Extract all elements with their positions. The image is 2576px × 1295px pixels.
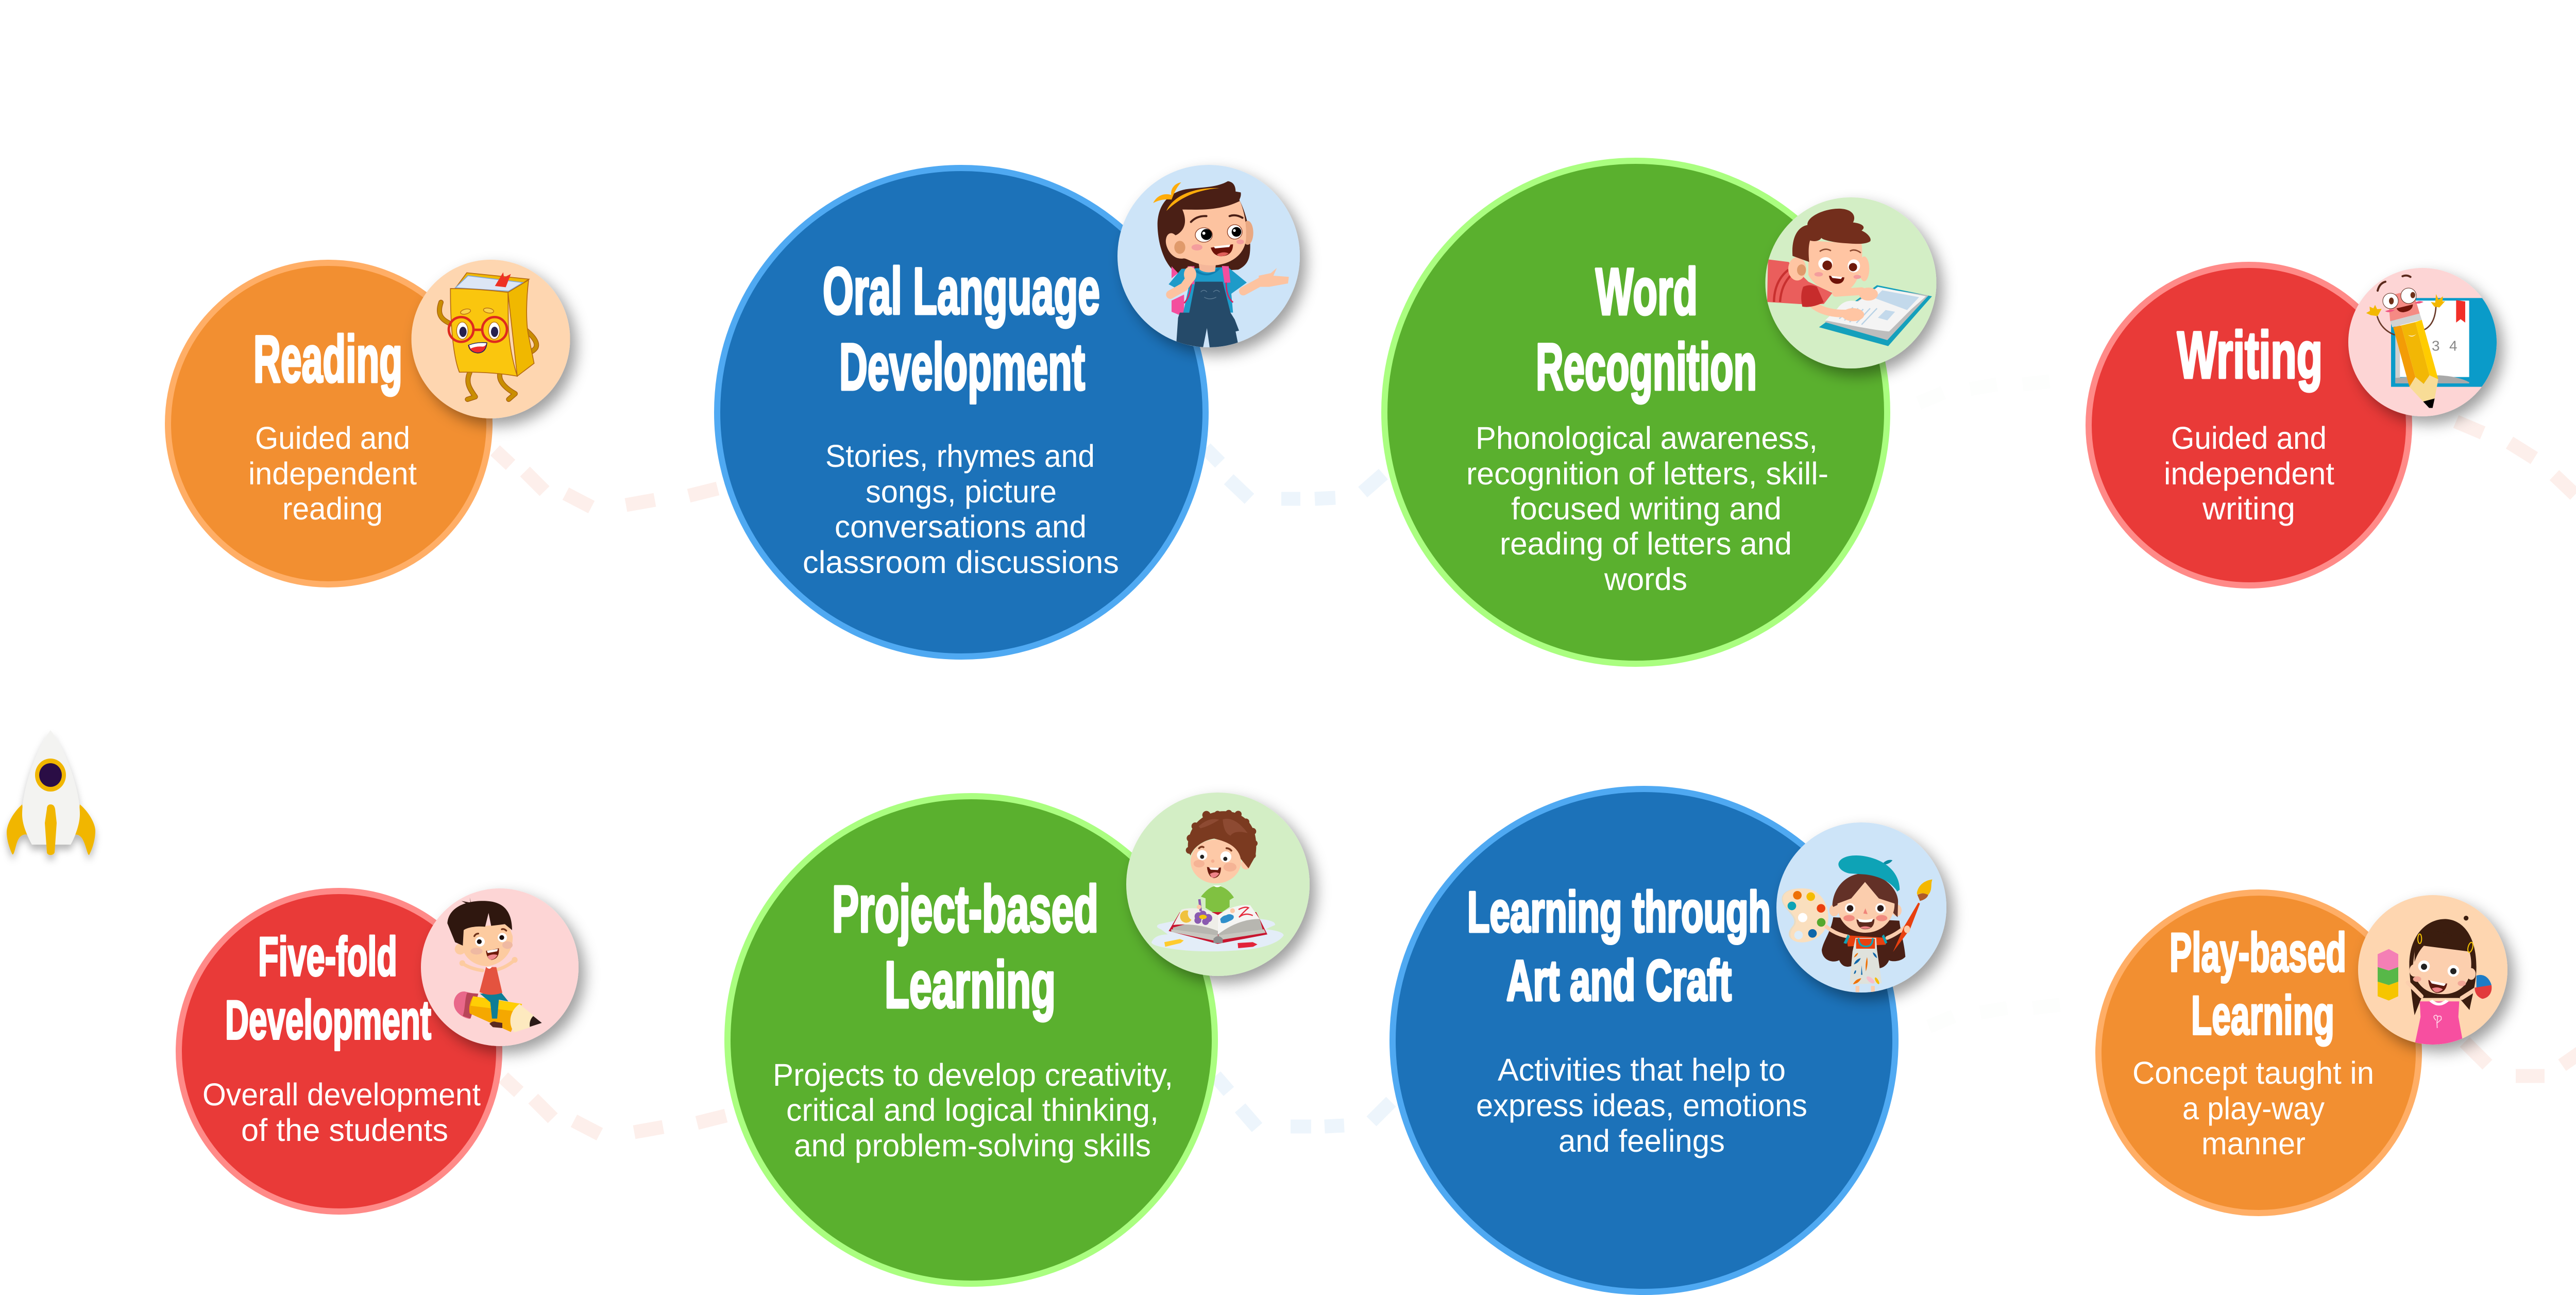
text: play-based description: a play-way: [2182, 1091, 2325, 1126]
heading: word recognition: Word: [1596, 255, 1698, 329]
dashed path: five-fold to project-based: [503, 1078, 726, 1134]
panel: five-fold development: [179, 888, 579, 1212]
panel: reading: [168, 260, 570, 584]
text: project-based description: Projects to develop creativity,: [773, 1057, 1173, 1092]
icon: pencil character with notebook: 4: [2449, 338, 2458, 354]
text: art and craft description: Activities that help to: [1498, 1052, 1786, 1087]
text: reading description: independent: [248, 456, 417, 491]
heading: play-based learning: Learning: [2191, 984, 2334, 1046]
text: five-fold description: [202, 1077, 481, 1148]
text: art and craft description: [1476, 1052, 1807, 1158]
dashed path: reading to oral language: [495, 450, 718, 507]
heading: reading: Reading: [253, 323, 402, 396]
badge: writing: [2348, 268, 2497, 416]
dashed path: project-based to art and craft: [1215, 1076, 1391, 1128]
text: project-based description: and problem-solving skills: [794, 1128, 1151, 1163]
icon: talking girl: [1153, 181, 1289, 349]
text: play-based description: manner: [2201, 1126, 2306, 1161]
panel: project-based learning: [727, 793, 1310, 1284]
badge: play-based: [2358, 895, 2507, 1045]
dashed path: word recognition to writing: [1919, 381, 2049, 403]
icon: rocket: [7, 730, 95, 855]
icon: pencil character with notebook: 3: [2432, 338, 2440, 354]
circle: play-based: [2098, 893, 2419, 1213]
text: five-fold description: Overall development: [202, 1077, 481, 1112]
heading: play-based learning: [2170, 921, 2346, 1046]
panel: learning through art and craft: [1393, 789, 1946, 1292]
text: five-fold description: of the students: [241, 1113, 448, 1148]
text: project-based description: [773, 1057, 1173, 1163]
text: art and craft description: express ideas, emotions: [1476, 1088, 1807, 1123]
text: word recognition description: [1466, 421, 1828, 597]
heading: five-fold development: Development: [225, 989, 431, 1051]
heading: oral language development: [823, 255, 1100, 404]
icon: boy reading a book: [1767, 209, 1932, 346]
dashed path: art and craft to play-based: [1929, 1005, 2060, 1027]
heading: project-based learning: Project-based: [832, 872, 1098, 946]
text: oral language description: songs, picture: [866, 474, 1057, 509]
circle: art and craft: [1393, 789, 1895, 1292]
badge: project-based: [1126, 793, 1310, 976]
panel: oral language development: [717, 165, 1300, 657]
heading: learning through art and craft: Art and Craft: [1506, 949, 1732, 1013]
text: word recognition description: recognition of letters, skill-: [1466, 456, 1828, 491]
text: writing description: writing: [2202, 491, 2295, 526]
text: oral language description: conversations and: [835, 509, 1087, 544]
text: word recognition description: words: [1604, 562, 1687, 597]
badge: art and craft: [1776, 822, 1946, 993]
dashed path: oral language to word recognition: [1206, 448, 1383, 499]
text: writing description: Guided and: [2171, 421, 2327, 456]
text: word recognition description: reading of letters and: [1500, 526, 1792, 561]
text: project-based description: critical and logical thinking,: [786, 1092, 1159, 1128]
heading: five-fold development: Five-fold: [258, 926, 397, 987]
text: play-based description: Concept taught in: [2132, 1055, 2374, 1090]
text: word recognition description: Phonological awareness,: [1476, 421, 1818, 456]
heading: word recognition: [1536, 255, 1757, 404]
circle: oral language: [717, 168, 1206, 657]
icon: girl painter: [1782, 855, 1933, 992]
text: reading description: [248, 421, 417, 526]
badge: word recognition: [1765, 197, 1936, 368]
text: art and craft description: and feelings: [1558, 1123, 1725, 1158]
text: play-based description: [2132, 1055, 2374, 1161]
icon: pencil character with notebook: [2366, 276, 2498, 408]
panel: play-based learning: [2098, 893, 2507, 1213]
text: oral language description: [803, 439, 1119, 580]
text: writing description: independent: [2164, 456, 2334, 491]
heading: word recognition: Recognition: [1536, 330, 1757, 404]
heading: play-based learning: Play-based: [2170, 921, 2346, 983]
circle: project-based: [727, 796, 1215, 1284]
badge: reading: [411, 260, 570, 418]
heading: five-fold development: [225, 926, 431, 1051]
text: oral language description: classroom discussions: [803, 545, 1119, 580]
text: reading description: reading: [282, 491, 383, 526]
heading: oral language development: Development: [839, 330, 1085, 404]
panel: word recognition: [1384, 161, 1936, 664]
heading: learning through art and craft: Learning through: [1467, 880, 1771, 944]
panel: writing: [2089, 265, 2498, 585]
heading: oral language development: Oral Language: [823, 255, 1100, 328]
heading: project-based learning: [832, 872, 1098, 1022]
heading: writing: Writing: [2177, 318, 2323, 392]
circle: reading: [168, 263, 489, 584]
circle: five-fold: [179, 891, 499, 1212]
badge: five-fold: [421, 888, 579, 1046]
circle: word recognition: [1384, 161, 1887, 664]
icon: girl with toy blocks: [2378, 916, 2492, 1045]
heading: learning through art and craft: [1467, 880, 1771, 1013]
text: oral language description: Stories, rhymes and: [825, 439, 1095, 474]
badge: oral language: [1117, 165, 1300, 347]
icon: book character: [439, 272, 536, 399]
text: writing description: [2164, 421, 2334, 526]
dashed path: writing to play-based: [2456, 422, 2576, 1076]
heading: project-based learning: Learning: [885, 948, 1056, 1022]
text: reading description: Guided and: [255, 421, 410, 456]
circle: writing: [2089, 265, 2409, 585]
icon: boy riding a pencil: [447, 898, 542, 1032]
text: word recognition description: focused writing and: [1511, 491, 1782, 526]
icon: boy drawing in an open book: [1151, 810, 1284, 951]
